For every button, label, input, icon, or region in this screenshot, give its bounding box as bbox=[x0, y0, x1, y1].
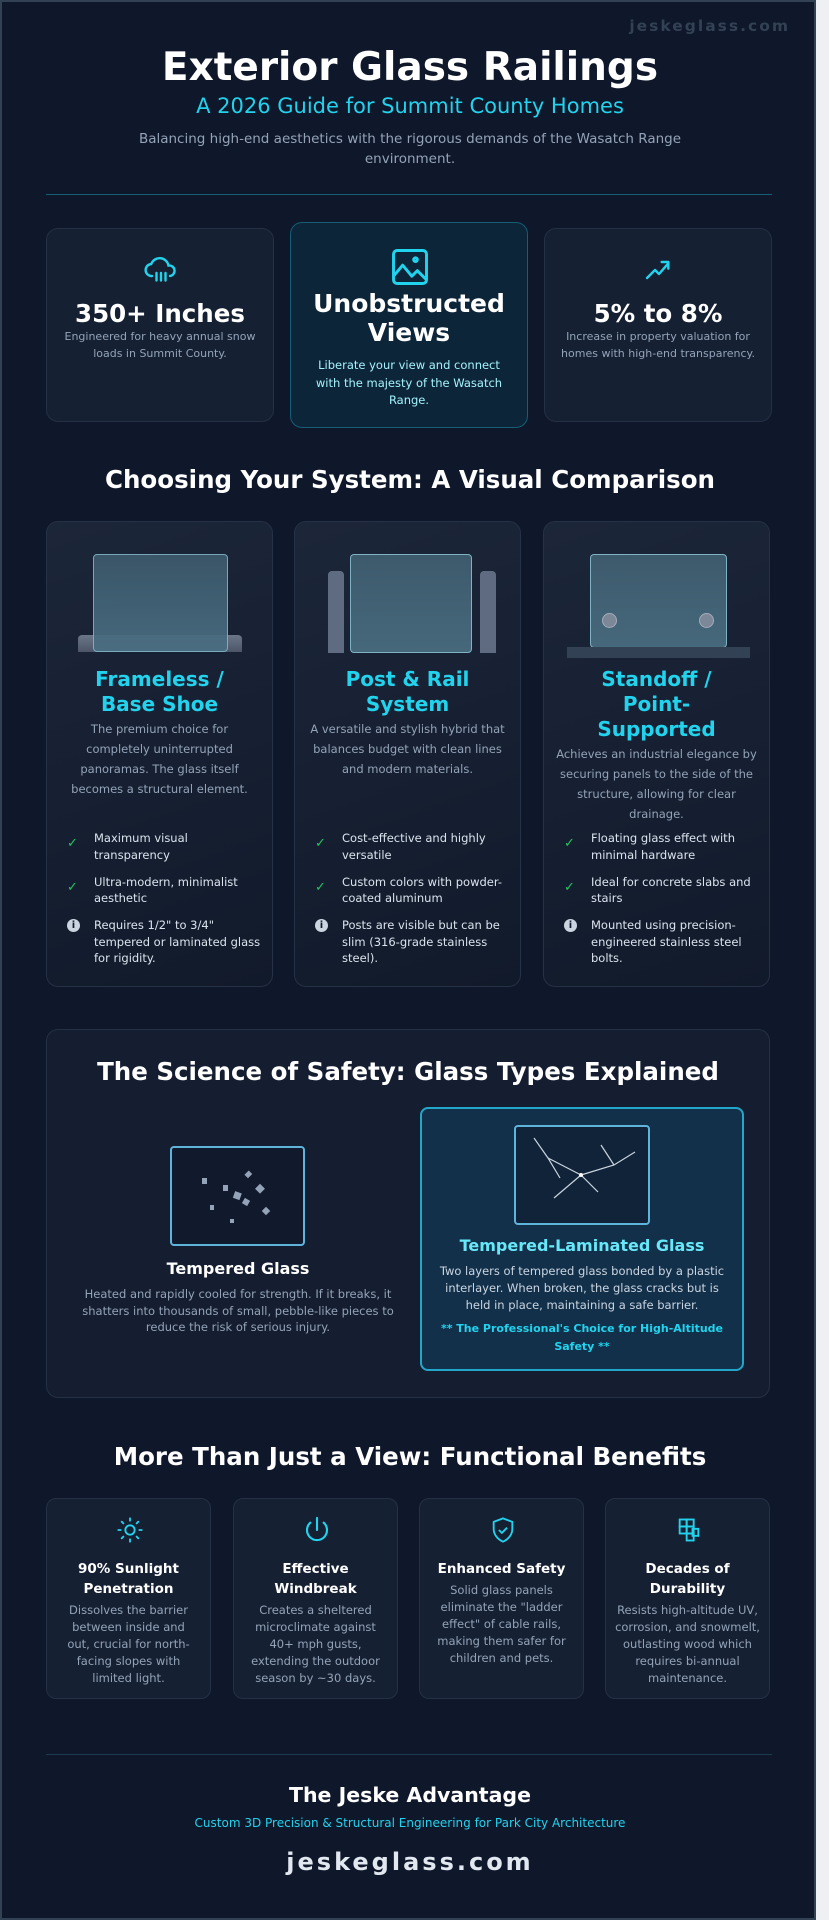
icon: cracked glass bbox=[514, 1125, 650, 1225]
stat value: Unobstructed Views bbox=[313, 289, 505, 347]
stat value: 5% to 8% bbox=[594, 299, 722, 328]
title and desc: System bbox=[366, 692, 449, 716]
intro text: Balancing high-end aesthetics with the rigorous demands of the Wasatch Range environment. bbox=[139, 131, 681, 167]
panel: frameless bbox=[46, 521, 273, 987]
tempered desc: Heated and rapidly cooled for strength. If it breaks, it shatters into thousands of small, pebble-like pieces to reduce the risk of serious injury. bbox=[82, 1287, 394, 1334]
stat value: 350+ Inches bbox=[75, 299, 245, 328]
title and desc: Resists high-altitude UV, corrosion, and snowmelt, outlasting wood which requires bi-annual maintenance. bbox=[615, 1603, 760, 1685]
callout: ** The Professional's Choice for High-Altitude Safety ** bbox=[441, 1322, 723, 1353]
benefit: windbreak bbox=[233, 1498, 398, 1699]
icon: power bbox=[306, 1516, 328, 1542]
title and desc: Point- bbox=[623, 692, 690, 716]
list: ✓ bbox=[315, 836, 326, 851]
title and desc: Supported bbox=[597, 717, 716, 741]
benefit: durability bbox=[605, 1498, 770, 1699]
list: Ultra-modern, minimalist aesthetic bbox=[94, 874, 238, 905]
title and desc: Base Shoe bbox=[101, 692, 218, 716]
title and desc: Effective Windbreak bbox=[274, 1561, 357, 1597]
laminated title: Tempered-Laminated Glass bbox=[460, 1236, 704, 1255]
heading: choosing: Choosing Your System: A Visual Comparison bbox=[105, 465, 715, 494]
list bbox=[67, 831, 260, 965]
list: Custom colors with powder-coated aluminum bbox=[342, 874, 502, 905]
title and desc bbox=[310, 667, 505, 776]
list: Maximum visual transparency bbox=[94, 831, 188, 862]
list: Ideal for concrete slabs and stairs bbox=[591, 874, 751, 905]
list: Posts are visible but can be slim (316-grade stainless steel). bbox=[342, 918, 500, 965]
title and desc: A versatile and stylish hybrid that balances budget with clean lines and modern materials. bbox=[310, 722, 505, 776]
list: ✓ bbox=[564, 880, 575, 894]
panel: safety bbox=[46, 1029, 770, 1398]
list: Cost-effective and highly versatile bbox=[342, 831, 486, 862]
title and desc bbox=[615, 1561, 760, 1685]
title and desc: Post & Rail bbox=[346, 667, 469, 691]
list: Floating glass effect with minimal hardware bbox=[591, 831, 735, 862]
icon: image bbox=[392, 249, 428, 285]
title and desc: The premium choice for completely uninterrupted panoramas. The glass itself becomes a structural element. bbox=[71, 722, 248, 796]
title and desc bbox=[251, 1561, 380, 1685]
title and desc: Solid glass panels eliminate the "ladder effect" of cable rails, making them safer for children and pets. bbox=[437, 1583, 566, 1665]
title and desc: Dissolves the barrier between inside and out, crucial for north-facing slopes with limited light. bbox=[67, 1603, 190, 1685]
icon: sun bbox=[117, 1517, 143, 1543]
list: i bbox=[72, 920, 75, 931]
title and desc: Creates a sheltered microclimate against 40+ mph gusts, extending the outdoor season by ~30 days. bbox=[251, 1603, 380, 1685]
list: i bbox=[320, 920, 323, 931]
panel: post and rail bbox=[294, 521, 521, 987]
footer subtitle: Custom 3D Precision & Structural Engineering for Park City Architecture bbox=[195, 1816, 625, 1830]
stat desc: Increase in property valuation for homes with high-end transparency. bbox=[561, 330, 755, 360]
subtitle: A 2026 Guide for Summit County Homes bbox=[196, 94, 624, 118]
title and desc: 90% Sunlight Penetration bbox=[78, 1561, 179, 1597]
illustration: posts and glass bbox=[328, 571, 344, 653]
icon: blocks bbox=[678, 1518, 700, 1542]
title: Exterior Glass Railings bbox=[162, 45, 658, 90]
benefit: safety bbox=[419, 1498, 584, 1699]
title and desc: Decades of Durability bbox=[645, 1561, 730, 1597]
panel: standoff bbox=[543, 521, 770, 987]
stat desc: Liberate your view and connect with the majesty of the Wasatch Range. bbox=[316, 358, 502, 407]
stat desc: Engineered for heavy annual snow loads in Summit County. bbox=[64, 330, 256, 360]
title and desc: Frameless / bbox=[95, 667, 224, 691]
heading: The Science of Safety: Glass Types Explained bbox=[97, 1057, 719, 1086]
illustration: base shoe bbox=[78, 635, 242, 652]
stat card: value bbox=[544, 228, 772, 422]
list bbox=[315, 831, 502, 965]
title and desc: Achieves an industrial elegance by securing panels to the side of the structure, allowing for clear drainage. bbox=[556, 747, 757, 821]
icon: trending up bbox=[646, 260, 670, 280]
icon: cloud rain bbox=[144, 257, 176, 282]
footer heading: The Jeske Advantage bbox=[289, 1783, 531, 1807]
title and desc bbox=[67, 1561, 190, 1685]
footer url: jeskeglass.com bbox=[286, 1848, 534, 1876]
watermark: jeskeglass.com bbox=[629, 17, 790, 35]
icon: shield check bbox=[492, 1517, 514, 1543]
title and desc bbox=[556, 667, 757, 821]
illustration: standoff glass bbox=[590, 554, 727, 648]
list: Requires 1/2" to 3/4" tempered or laminated glass for rigidity. bbox=[94, 918, 260, 965]
title and desc: Standoff / bbox=[601, 667, 712, 691]
list: ✓ bbox=[564, 836, 575, 851]
icon: tempered shards bbox=[170, 1146, 305, 1246]
stat card: views bbox=[290, 222, 528, 428]
stat card: snow bbox=[46, 228, 274, 422]
benefit: sunlight bbox=[46, 1498, 211, 1699]
list: ✓ bbox=[67, 836, 78, 851]
card: laminated bbox=[420, 1107, 744, 1371]
list: i bbox=[569, 920, 572, 931]
heading: benefits: More Than Just a View: Functional Benefits bbox=[114, 1442, 706, 1471]
title and desc: Enhanced Safety bbox=[438, 1561, 565, 1577]
list bbox=[564, 831, 751, 965]
tempered title: Tempered Glass bbox=[167, 1259, 309, 1278]
title and desc bbox=[71, 667, 248, 796]
list: Mounted using precision-engineered stainless steel bolts. bbox=[591, 918, 742, 965]
list: ✓ bbox=[315, 880, 326, 894]
laminated desc: Two layers of tempered glass bonded by a plastic interlayer. When broken, the glass cracks but is held in place, maintaining a safe barrier. bbox=[440, 1264, 724, 1312]
list: ✓ bbox=[67, 880, 78, 894]
